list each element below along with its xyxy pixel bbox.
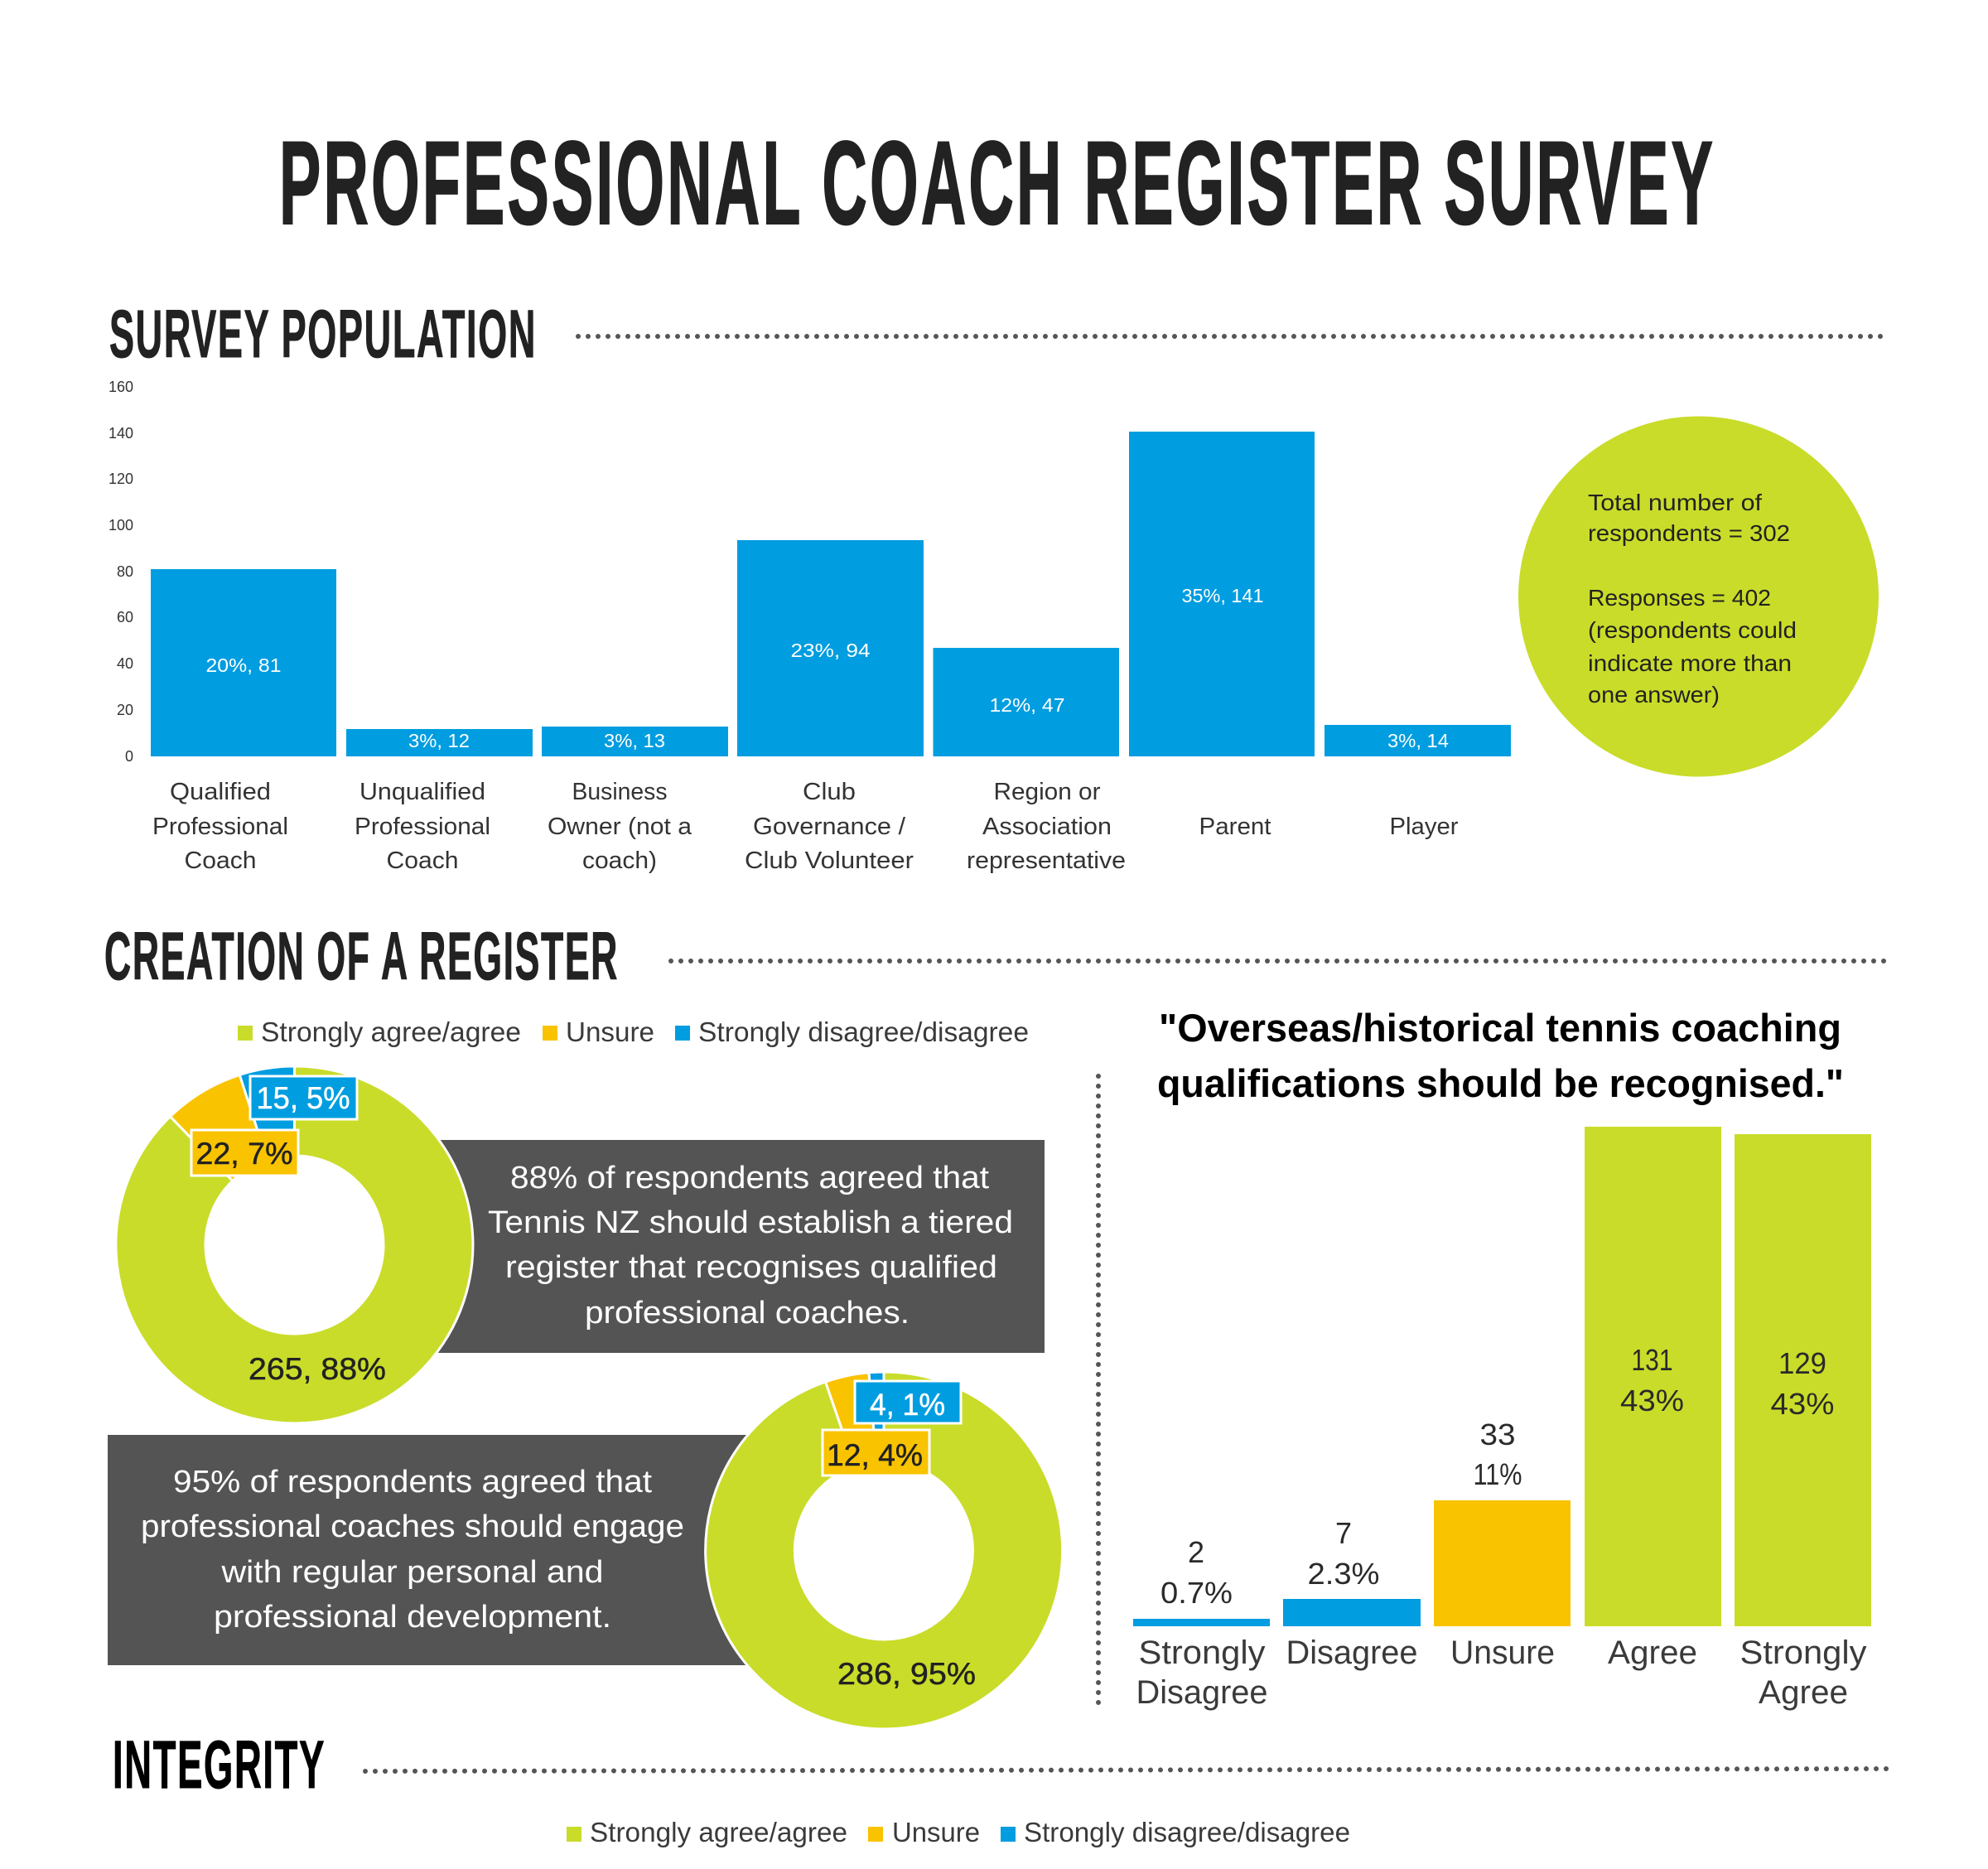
callout: 88% tiered register: 88% of respondents agreed that — [510, 1161, 989, 1195]
bar chart: overseas qualifications — [1133, 1127, 1871, 1711]
category labels: Player — [1390, 814, 1459, 840]
y axis labels — [109, 379, 133, 765]
value labels — [1160, 1343, 1834, 1610]
donut chart: tiered register — [116, 1066, 473, 1423]
donut chart: tiered register: 15, 5% — [257, 1081, 350, 1115]
category labels: coach) — [582, 848, 657, 874]
legend: integrity: Unsure — [892, 1817, 980, 1847]
category labels: Agree — [1608, 1635, 1697, 1671]
y axis labels: 40 — [117, 655, 133, 672]
legend: integrity: Strongly disagree/disagree — [1024, 1817, 1350, 1847]
callout: respondent totals circle: Total number of — [1588, 490, 1762, 515]
callout: 88% tiered register: register that recognises qualified — [505, 1250, 997, 1285]
category labels: Coach — [386, 848, 459, 874]
value labels: 33 — [1479, 1417, 1516, 1451]
callout: 95% professional development: professional development. — [214, 1600, 611, 1635]
y axis labels: 160 — [109, 379, 133, 395]
category labels: Unsure — [1450, 1635, 1555, 1671]
chart heading: overseas qualifications quote — [1157, 1006, 1844, 1105]
category labels: Strongly — [1138, 1635, 1266, 1671]
donut chart: professional development — [706, 1372, 1063, 1729]
bars — [151, 432, 1511, 756]
legend: register donuts: Strongly agree/agree — [261, 1017, 521, 1047]
category labels: Club Volunteer — [745, 848, 914, 874]
donut chart: professional development: 4, 1% — [870, 1388, 945, 1422]
callout: 95% professional development: 95% of respondents agreed that — [173, 1465, 652, 1500]
legend: register donuts — [238, 1017, 1029, 1047]
value labels: 2.3% — [1307, 1557, 1380, 1591]
heading: integrity: INTEGRITY — [113, 1727, 326, 1803]
category labels: Coach — [184, 848, 257, 874]
callout: respondent totals circle: one answer) — [1588, 682, 1720, 708]
heading: creation of a register: CREATION OF A REGISTER — [104, 919, 619, 994]
bar value labels: 35%, 141 — [1181, 585, 1264, 606]
chart heading: overseas qualifications quote: qualifications should be recognised." — [1157, 1061, 1844, 1105]
callout: 95% professional development — [108, 1435, 762, 1665]
callout: respondent totals circle: indicate more than — [1588, 650, 1792, 676]
callout: 88% tiered register: Tennis NZ should establish a tiered — [488, 1205, 1013, 1240]
legend: integrity: Strongly agree/agree — [590, 1817, 847, 1847]
category labels: Club — [803, 779, 856, 805]
category labels: Association — [982, 814, 1112, 840]
category labels: Strongly — [1740, 1635, 1867, 1671]
category labels: Parent — [1199, 814, 1271, 840]
donut chart: professional development: 12, 4% — [827, 1438, 923, 1472]
category labels: Disagree — [1136, 1674, 1267, 1711]
callout: 95% professional development: professional coaches should engage — [141, 1509, 684, 1544]
bar value labels — [205, 585, 1449, 751]
callout: 88% tiered register: professional coaches. — [585, 1296, 910, 1331]
bar value labels: 3%, 14 — [1387, 730, 1449, 751]
category labels: Agree — [1759, 1674, 1848, 1711]
chart heading: overseas qualifications quote: "Overseas/historical tennis coaching — [1159, 1006, 1841, 1050]
category labels: Region or — [994, 779, 1101, 805]
callout: 88% tiered register — [414, 1140, 1045, 1353]
legend: register donuts: Strongly disagree/disagree — [698, 1017, 1029, 1047]
bar value labels: 20%, 81 — [205, 654, 282, 676]
y axis labels: 60 — [117, 609, 133, 625]
value labels: 43% — [1771, 1387, 1834, 1421]
category labels: Professional — [152, 814, 288, 840]
callout: respondent totals circle: Responses = 402 — [1588, 585, 1771, 611]
value labels: 2 — [1188, 1535, 1204, 1569]
bar value labels: 23%, 94 — [790, 640, 871, 661]
donut chart: professional development: 286, 95% — [837, 1657, 976, 1691]
bar value labels: 12%, 47 — [989, 694, 1065, 716]
category labels — [1136, 1635, 1867, 1711]
y axis labels: 0 — [125, 748, 133, 765]
value labels: 0.7% — [1160, 1576, 1233, 1610]
bar chart: survey population — [109, 379, 1511, 874]
bars — [1133, 1127, 1871, 1626]
callout: 95% professional development: with regular personal and — [220, 1555, 603, 1590]
y axis labels: 100 — [109, 517, 133, 534]
callout: respondent totals circle — [1518, 416, 1879, 777]
legend: integrity — [567, 1817, 1350, 1847]
category labels: Unqualified — [359, 779, 485, 805]
value labels: 11% — [1473, 1457, 1522, 1491]
value labels: 43% — [1620, 1384, 1684, 1417]
callout: respondent totals circle: (respondents could — [1588, 617, 1797, 643]
y axis labels: 120 — [109, 471, 133, 487]
donut chart: tiered register: 22, 7% — [195, 1137, 293, 1171]
y axis labels: 80 — [117, 563, 133, 580]
category labels — [152, 779, 1459, 874]
bar value labels: 3%, 13 — [604, 730, 665, 751]
value labels: 7 — [1335, 1516, 1352, 1550]
category labels: Business — [572, 779, 668, 805]
category labels: Governance / — [753, 814, 906, 840]
legend: register donuts: Unsure — [566, 1017, 654, 1047]
y axis labels: 140 — [109, 425, 133, 442]
value labels: 131 — [1632, 1343, 1673, 1377]
value labels: 129 — [1778, 1346, 1826, 1380]
heading: integrity — [113, 1727, 1889, 1803]
category labels: Professional — [355, 814, 490, 840]
donut chart: tiered register: 265, 88% — [248, 1352, 386, 1386]
category labels: Disagree — [1286, 1635, 1418, 1671]
bar value labels: 3%, 12 — [408, 730, 470, 751]
category labels: Owner (not a — [548, 814, 692, 840]
heading: survey population: SURVEY POPULATION — [109, 297, 537, 372]
callout: respondent totals circle: respondents = 302 — [1588, 520, 1790, 546]
category labels: Qualified — [170, 779, 271, 805]
category labels: representative — [967, 848, 1126, 874]
y axis labels: 20 — [117, 702, 133, 718]
